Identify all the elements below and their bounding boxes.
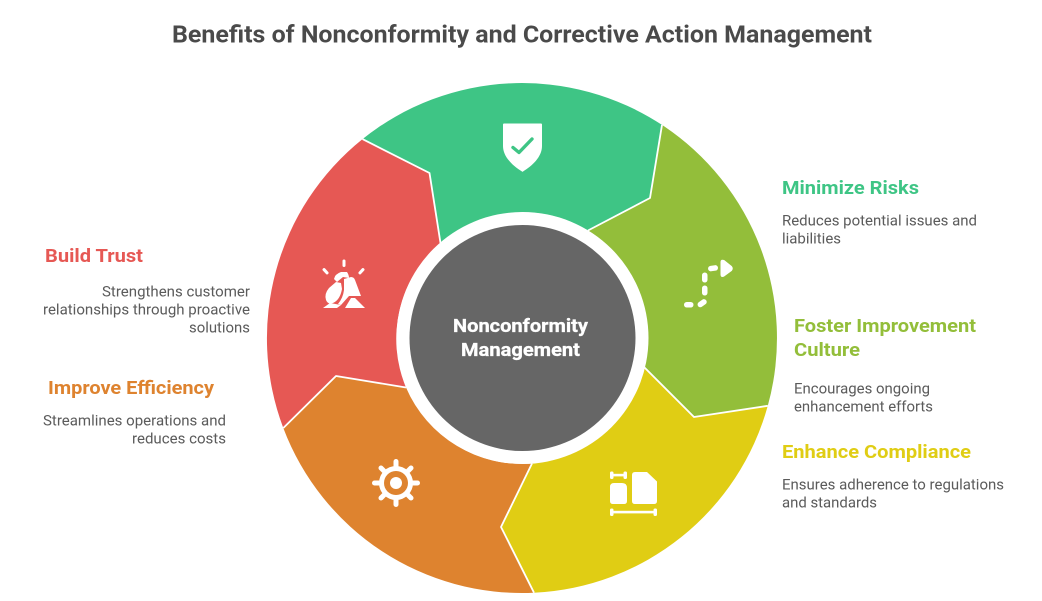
label: build trust: Build Trust (45, 245, 143, 267)
circular diagram (267, 83, 777, 593)
label: improve efficiency (43, 377, 226, 448)
icon: shield (503, 124, 542, 172)
icon: gear (374, 462, 418, 504)
label: minimize risks: Reduces potential issues and (782, 212, 977, 230)
segment: foster improvement culture (588, 125, 777, 417)
hub ring (396, 212, 648, 464)
segment: improve efficiency (283, 376, 534, 593)
label: build trust: Strengthens customer (102, 284, 250, 300)
label: enhance compliance: Enhance Compliance (782, 441, 971, 463)
icon: rocks and spark (322, 260, 365, 308)
segment: build trust (267, 139, 440, 428)
segment: enhance compliance (501, 367, 768, 593)
label: foster improvement culture: enhancement efforts (794, 398, 933, 416)
label: build trust: solutions (189, 320, 250, 336)
hub label: Management (461, 340, 580, 361)
label: improve efficiency: Streamlines operations and (43, 412, 226, 430)
segment dividers (283, 125, 768, 593)
label: minimize risks: liabilities (782, 230, 841, 248)
title: Benefits of Nonconformity and Corrective Action Management (172, 20, 872, 48)
hub label: Nonconformity (453, 316, 589, 337)
icon: document sizing (610, 472, 657, 516)
label: foster improvement culture: Culture (794, 339, 860, 361)
label: improve efficiency: reduces costs (132, 430, 226, 448)
label: foster improvement culture: Encourages ongoing (794, 380, 930, 398)
label: minimize risks (782, 177, 977, 248)
label: enhance compliance (782, 441, 1004, 512)
label: foster improvement culture (794, 315, 976, 416)
segment: minimize risks (362, 83, 662, 243)
label: enhance compliance: and standards (782, 494, 877, 512)
label: improve efficiency: Improve Efficiency (48, 377, 215, 399)
label: enhance compliance: Ensures adherence to regulations (782, 476, 1004, 494)
icon: dotted path arrow (684, 260, 732, 308)
label: build trust (43, 245, 250, 336)
label: build trust: relationships through proactive (43, 302, 250, 318)
label: foster improvement culture: Foster Improvement (794, 315, 976, 337)
label: minimize risks: Minimize Risks (782, 177, 919, 199)
hub circle (410, 225, 636, 451)
